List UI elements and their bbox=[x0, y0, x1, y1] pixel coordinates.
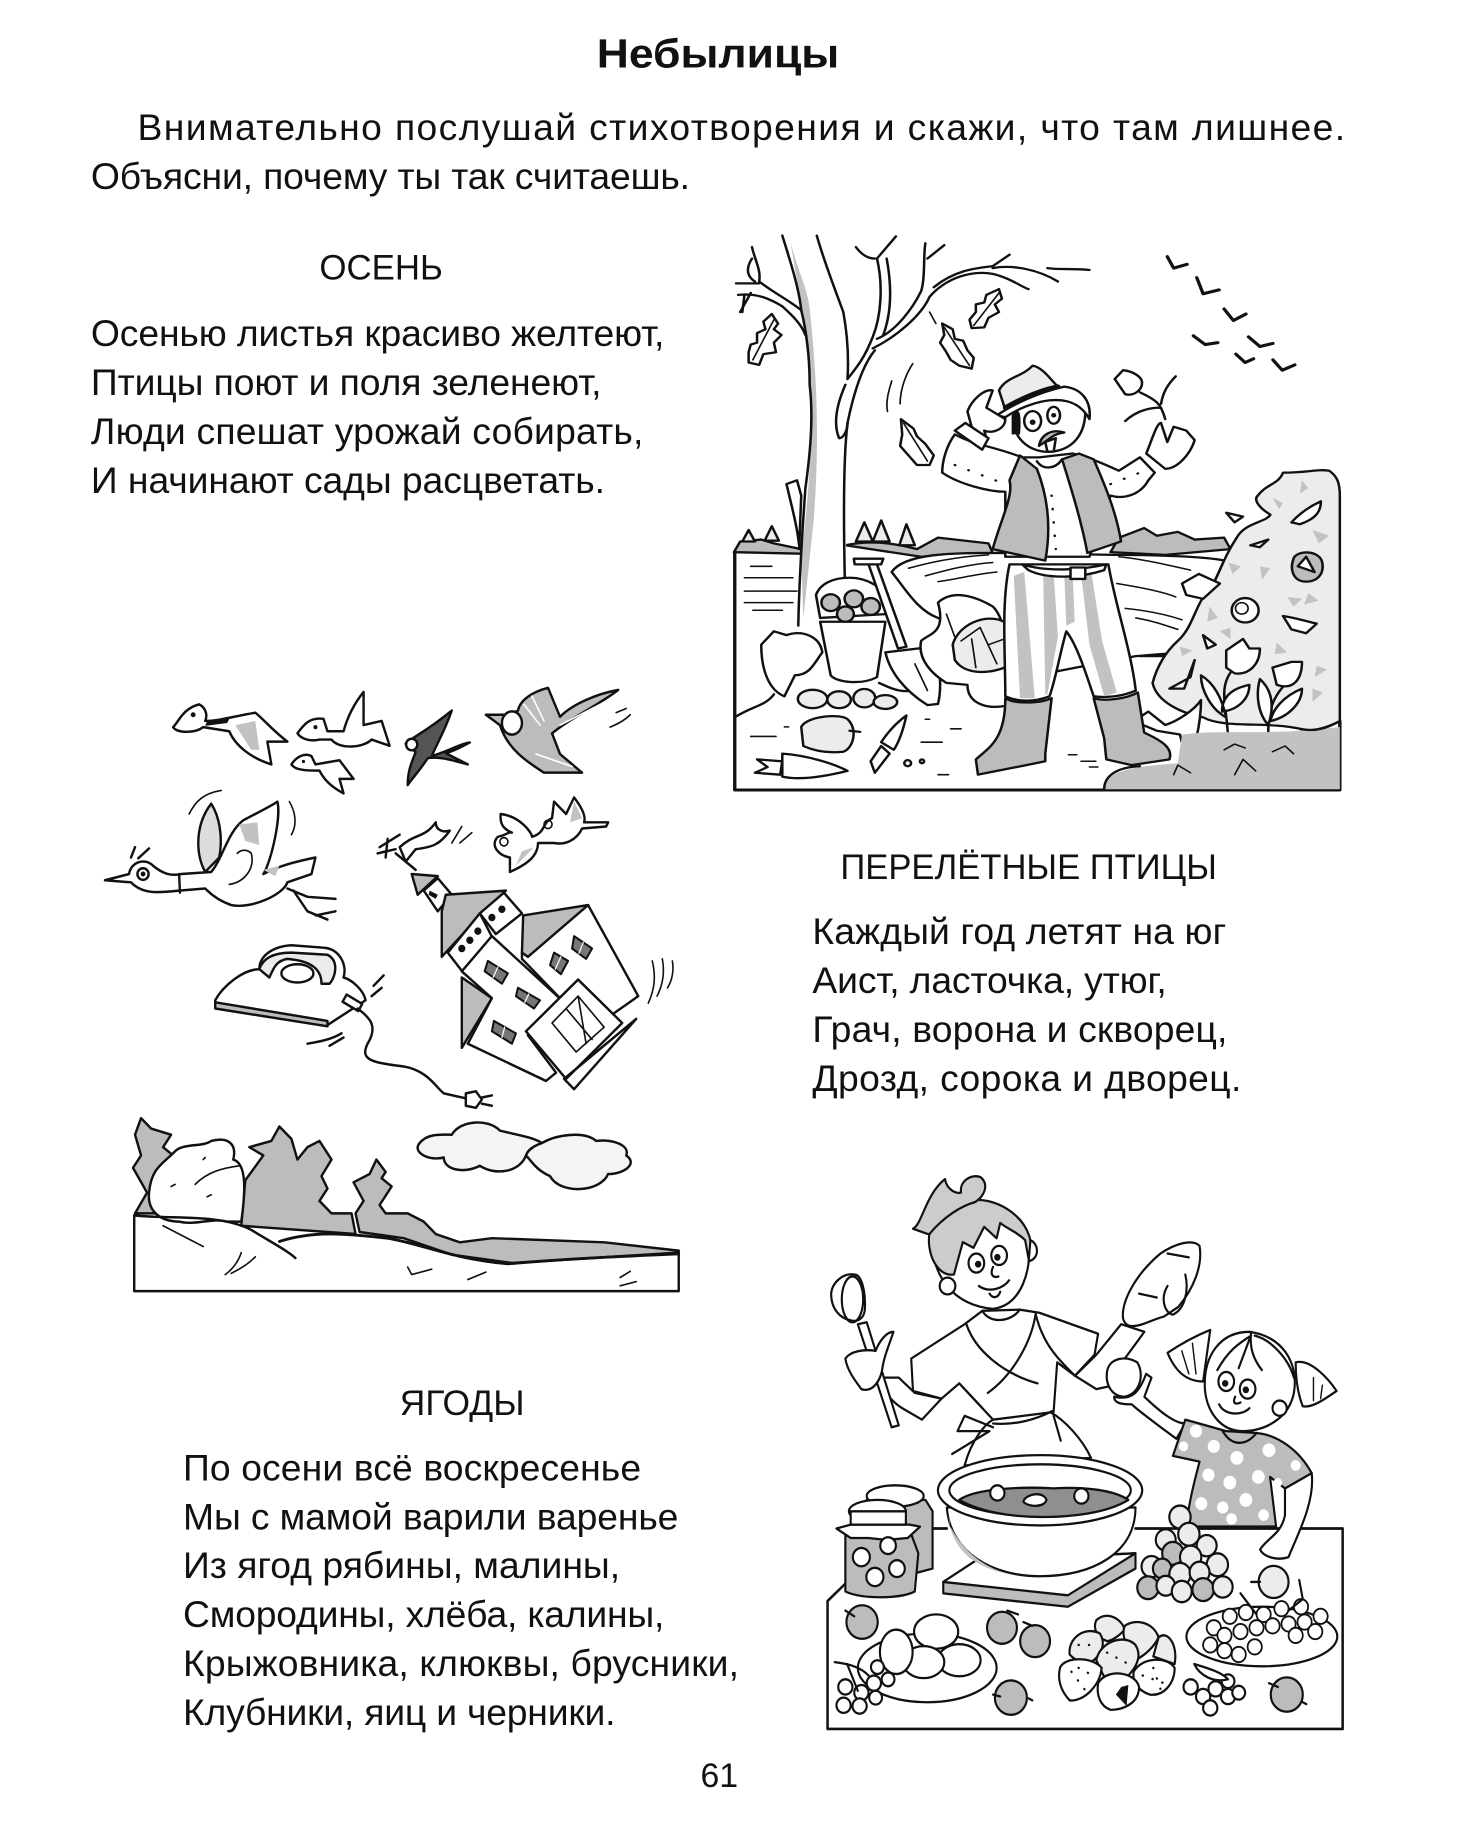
clouds bbox=[418, 1122, 631, 1189]
potatoes, pepper and carrots bbox=[751, 689, 1098, 778]
bread bbox=[1123, 1242, 1200, 1326]
spoon bbox=[831, 1274, 865, 1321]
plate of eggs bbox=[858, 1614, 997, 1702]
dress bbox=[1173, 1420, 1312, 1527]
plate of currants bbox=[1186, 1580, 1337, 1666]
head bbox=[1013, 400, 1085, 452]
daughter bbox=[1114, 1330, 1337, 1559]
illustration: flying birds, iron and palace bbox=[105, 688, 679, 1291]
poem: autumn: И начинают сады расцветать. bbox=[91, 459, 605, 501]
palace bbox=[396, 853, 673, 1089]
intro text: Объясни, почему ты так считаешь. bbox=[91, 155, 690, 197]
forest landscape bbox=[133, 1118, 679, 1291]
poem: berries: По осени всё воскресенье bbox=[183, 1446, 641, 1488]
grapes bbox=[1137, 1506, 1233, 1602]
intro text bbox=[91, 106, 1345, 197]
stork bbox=[105, 790, 336, 920]
hat bbox=[997, 387, 1090, 419]
pigtails bbox=[1168, 1330, 1210, 1381]
torso and sleeves bbox=[911, 1310, 1098, 1420]
poem: autumn bbox=[91, 249, 664, 501]
flying birds bbox=[1167, 257, 1295, 370]
egg in hand bbox=[1107, 1358, 1141, 1397]
bush with roses bbox=[1153, 470, 1340, 730]
ducks bbox=[173, 692, 390, 793]
head and hair bbox=[931, 1205, 1029, 1309]
head bbox=[1205, 1332, 1295, 1431]
illustration: mother and daughter making jam bbox=[828, 1176, 1343, 1729]
tree bbox=[736, 236, 1089, 626]
raised hand bbox=[967, 390, 1005, 438]
belt bbox=[1022, 564, 1106, 577]
pond bbox=[892, 553, 1224, 671]
title: Небылицы bbox=[597, 31, 839, 77]
arm bbox=[1114, 1374, 1185, 1439]
intro text: Внимательно послушай стихотворения и скажи, что там лишнее. bbox=[138, 106, 1345, 148]
poem: migratory birds: Грач, ворона и скворец, bbox=[812, 1008, 1227, 1050]
poem: berries: Клубники, яиц и черники. bbox=[183, 1691, 615, 1733]
shirt bbox=[942, 434, 1155, 557]
poem: autumn: Осенью листья красиво желтеют, bbox=[91, 312, 664, 354]
poem: migratory birds: Дрозд, сорока и дворец. bbox=[812, 1057, 1241, 1099]
arms bbox=[879, 1378, 941, 1420]
field frame bbox=[735, 553, 1340, 790]
poem: migratory birds: ПЕРЕЛЁТНЫЕ ПТИЦЫ bbox=[840, 848, 1217, 887]
tulips bbox=[1134, 639, 1302, 759]
jam bowl bbox=[938, 1455, 1142, 1576]
distant hills and trees bbox=[734, 520, 1230, 557]
table bbox=[828, 1528, 1343, 1729]
currants left bbox=[835, 1660, 894, 1714]
strawberries bbox=[1059, 1616, 1175, 1710]
gray ground bbox=[1104, 727, 1340, 789]
poem: migratory birds bbox=[812, 848, 1241, 1099]
poem: migratory birds: Каждый год летят на юг bbox=[812, 910, 1226, 952]
poem: autumn: ОСЕНЬ bbox=[319, 249, 443, 288]
poem: berries: Крыжовника, клюквы, брусники, bbox=[183, 1642, 739, 1684]
small birds bbox=[495, 797, 608, 872]
poem: autumn: Птицы поют и поля зеленеют, bbox=[91, 361, 601, 403]
hand with spoon bbox=[845, 1332, 893, 1390]
poem: berries: Мы с мамой варили варенье bbox=[183, 1495, 678, 1537]
iron bbox=[215, 945, 492, 1108]
page number: 61 bbox=[701, 1757, 738, 1795]
poem: berries: Смородины, хлёба, калины, bbox=[183, 1593, 664, 1635]
skirt bbox=[965, 1412, 1091, 1465]
currants right bbox=[1184, 1664, 1245, 1716]
loose berries bbox=[845, 1566, 1306, 1715]
weathervane bbox=[378, 822, 472, 862]
left hand with flower bbox=[1146, 423, 1195, 469]
gardener bbox=[942, 366, 1195, 775]
shovel bbox=[854, 559, 940, 705]
board bbox=[943, 1553, 1135, 1607]
illustration: gardener in autumn garden bbox=[734, 236, 1340, 790]
jars bbox=[836, 1485, 933, 1597]
swallow bbox=[406, 711, 470, 785]
trousers bbox=[1004, 564, 1136, 701]
poem: autumn: Люди спешат урожай собирать, bbox=[91, 410, 643, 452]
magpie bbox=[486, 688, 630, 773]
cabbage and sack bbox=[761, 595, 1012, 707]
poem: berries: ЯГОДЫ bbox=[400, 1384, 525, 1423]
poem: berries bbox=[183, 1384, 739, 1733]
ground line bbox=[735, 656, 1165, 717]
mother bbox=[831, 1176, 1200, 1465]
poem: berries: Из ягод рябины, малины, bbox=[183, 1544, 620, 1586]
bucket with potatoes bbox=[816, 578, 887, 682]
boots bbox=[976, 698, 1052, 775]
poem: migratory birds: Аист, ласточка, утюг, bbox=[812, 959, 1167, 1001]
vest bbox=[993, 455, 1048, 561]
oak leaves bbox=[749, 289, 1002, 465]
